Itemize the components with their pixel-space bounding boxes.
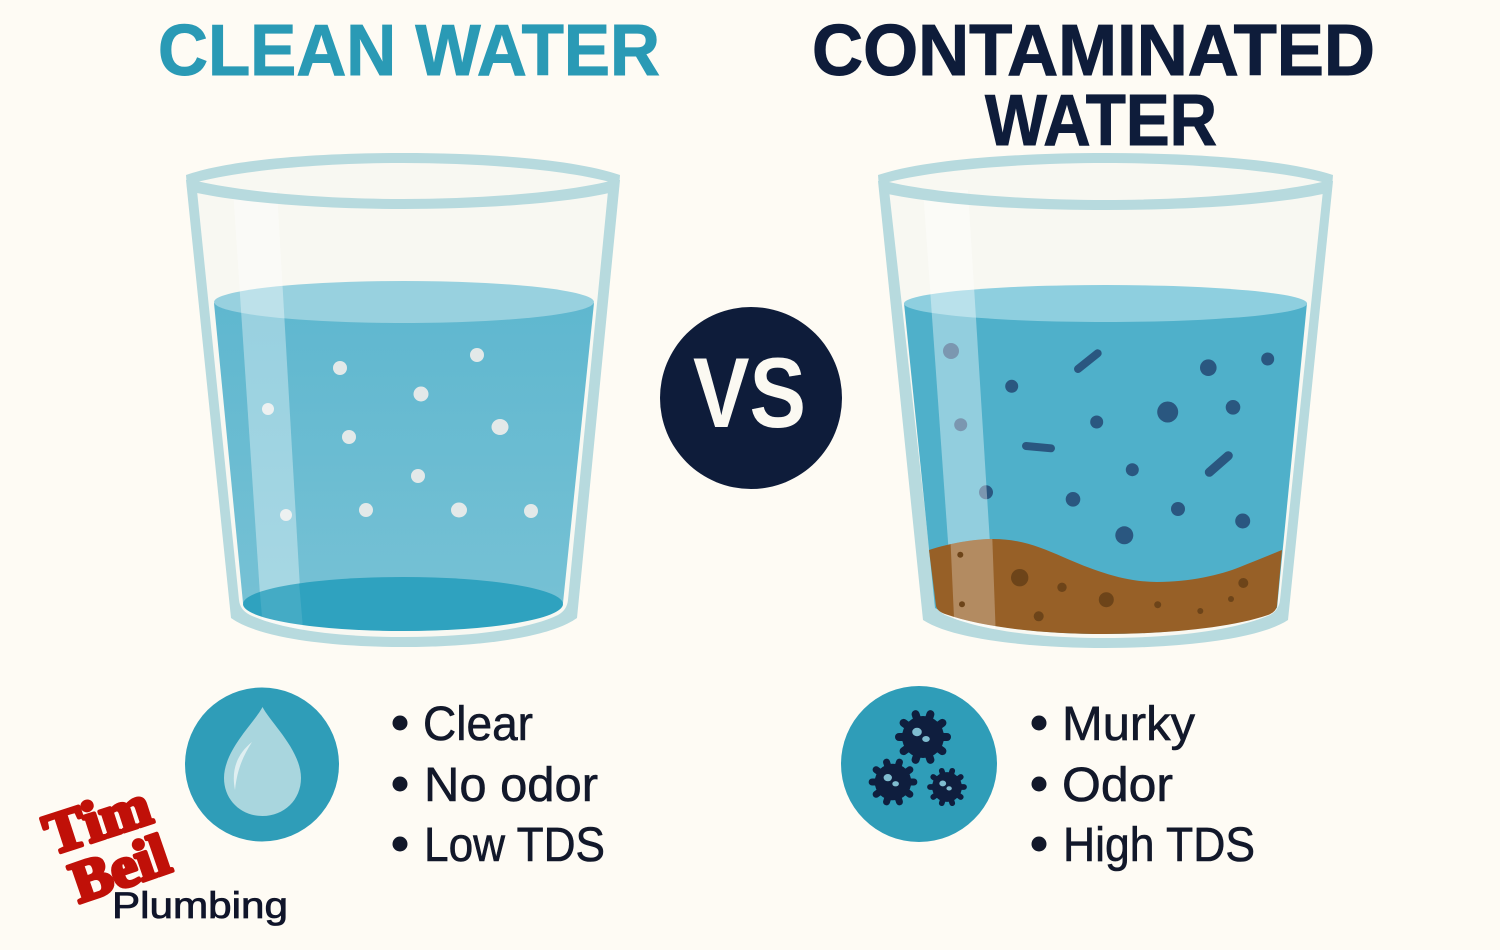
glass highlight [930,290,990,545]
list: contaminated water traits: High TDS [1063,819,1255,872]
glass: contaminated water [878,153,1333,648]
water floor ellipse [243,577,563,631]
title: contaminated water [812,11,1375,161]
title: contaminated water: CONTAMINATED [812,11,1375,91]
list: clean water traits: Clear [423,698,533,751]
sediment specks [957,552,1248,621]
glass rim [186,153,620,209]
clean water bubbles [262,348,538,521]
logo: Tim Beil Plumbing: Tim [36,772,159,867]
logo: Tim Beil Plumbing: Beil [62,821,178,915]
vs badge [660,307,842,489]
list: contaminated water traits: Odor [1062,759,1173,812]
vs badge: VS [693,337,806,448]
glass rim [878,153,1333,210]
list: clean water traits: No odor [424,759,598,812]
contaminant particles [943,343,1274,544]
icon: germs [841,686,997,842]
title: contaminated water: WATER [985,81,1217,161]
icon: water drop [185,688,339,842]
list: clean water traits: Low TDS [424,819,605,872]
list: contaminated water traits: Murky [1062,698,1195,751]
title: clean water: CLEAN WATER [158,11,660,91]
list: clean water traits [392,698,605,872]
contaminated water body [904,285,1307,634]
glass highlight [240,286,300,592]
logo: Tim Beil Plumbing: Plumbing [112,885,288,926]
list: contaminated water traits [1032,698,1255,872]
logo: Tim Beil Plumbing [36,772,288,926]
sediment layer [929,539,1282,634]
glass: clean water [186,153,620,647]
clean water body [214,281,594,631]
